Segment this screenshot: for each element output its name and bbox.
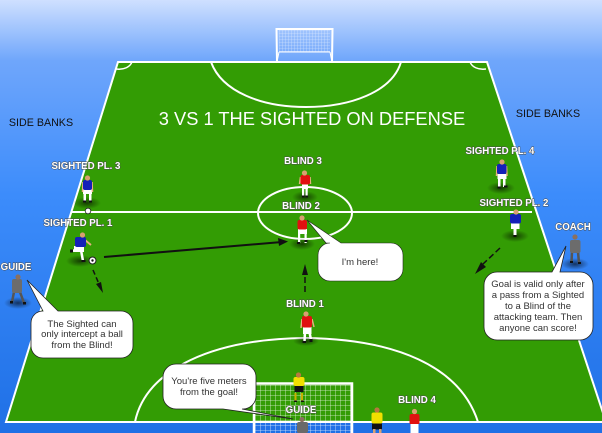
pitch markings [71,62,532,422]
player: blind 3 [292,170,318,203]
arrow: pass to blind 2 [104,238,288,257]
callout: coach rule: Goal is valid only after [491,279,585,290]
labels [1,146,591,416]
labels: BLIND 1 [286,299,324,310]
player: guide left [4,274,32,309]
labels: BLIND 3 [284,156,322,167]
callout: five meters: from the goal! [180,387,238,398]
callout: I'm here: I'm here! [342,257,378,268]
player: coach [561,234,589,270]
callout: the sighted: The Sighted can [47,319,117,330]
labels: SIGHTED PL. 2 [480,198,548,209]
player: yellow [372,407,382,433]
arrow: sighted 2 movement [475,248,500,274]
arrow: blind 1 movement [302,264,308,292]
player: sighted 4 [487,159,515,194]
callout: coach rule: anyone can score! [499,323,577,334]
player: sighted 1 [66,232,94,267]
labels: SIGHTED PL. 4 [466,146,535,157]
labels: SIGHTED PL. 3 [52,161,121,172]
labels: BLIND 4 [398,395,436,406]
callout: I'm here [307,220,403,281]
callout: five meters: You're five meters [171,376,247,387]
labels: GUIDE [286,405,317,416]
labels: GUIDE [1,262,32,273]
callout: five meters [163,364,293,419]
player: sighted 2 [501,209,529,242]
player: goalkeeper [294,372,304,402]
callout: the sighted: from the Blind! [51,340,113,351]
callout: coach rule: a pass from a Sighted [492,290,584,301]
callout: the sighted: only intercept a ball [41,329,123,340]
labels: BLIND 2 [282,201,320,212]
labels: COACH [555,222,591,233]
title: 3 VS 1 THE SIGHTED ON DEFENSE [159,108,465,129]
far goal [276,29,332,62]
arrow: sighted 1 movement [93,270,103,293]
player: blind 1 [293,311,319,346]
callout: coach rule: to a Blind of the [505,301,571,312]
player: sighted 3 [73,175,101,209]
player: blind 2 [289,215,315,250]
player: blind 4 [410,409,420,433]
side banks right: SIDE BANKS [516,108,580,120]
ball near sighted 3 [85,208,91,214]
labels: SIGHTED PL. 1 [44,218,113,229]
callout: coach rule: attacking team. Then [494,312,582,323]
side banks left: SIDE BANKS [9,117,73,129]
callout: the sighted [27,280,133,358]
near goal [254,384,352,433]
callout: coach rule [484,246,593,340]
ball sighted 1 [89,257,96,264]
player: guide near goal [297,417,308,433]
